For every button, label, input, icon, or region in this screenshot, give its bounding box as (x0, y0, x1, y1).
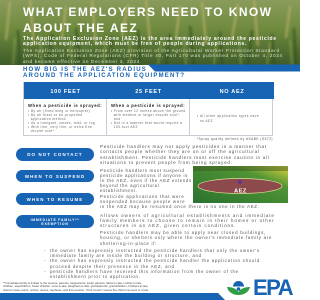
pill: when to resume (16, 193, 94, 205)
table: AEZ radius (23, 82, 273, 136)
pill: when to suspend: WHEN TO SUSPEND (25, 174, 85, 178)
pill: immediate family exemption (16, 215, 94, 228)
text: when to suspend: establishment. (100, 188, 137, 192)
footnote (3, 281, 149, 292)
25 feet list: with medium or larger droplet size*, (114, 112, 181, 116)
25 feet list (111, 108, 186, 128)
image: AEZ field illustration (193, 166, 288, 203)
pill: immediate family exemption: EXEMPTION (41, 222, 69, 226)
list markers: - (44, 269, 45, 274)
header: no AEZ: NO AEZ (220, 89, 244, 95)
text: do not contact: Pesticide handlers may not apply pesticides in a manner that (100, 144, 267, 149)
hero regulatory text: The Application Exclusion Zone (AEZ) provision of the Agricultural Worker Protection Standard (23, 48, 280, 53)
column: 25 feet details (107, 99, 190, 136)
list: exemption conditions: immediate family are inside the building or structure, and (50, 253, 202, 258)
hero title: ABOUT THE AEZ (23, 21, 138, 35)
list markers: - (44, 248, 45, 253)
text: immediate family exemption: Allows owners of agricultural establishments and immediate (100, 213, 275, 218)
footnote: sisters-in-law, aunts, uncles, nieces, nephews, and first cousins. "First cousin" means the child of an aunt or uncle. (3, 288, 149, 292)
pill: when to suspend (16, 170, 94, 182)
section heading (23, 66, 185, 79)
icon: EPA flower (227, 281, 250, 295)
list: exemption conditions: pesticide handlers have received this information from the owner of the (50, 269, 239, 274)
list markers (44, 248, 46, 274)
column: no AEZ details: no AEZ (200, 119, 213, 123)
100 feet list: droplet size* (31, 128, 54, 132)
column: 100 feet details (24, 99, 107, 136)
section heading: AROUND THE APPLICATION EQUIPMENT? (23, 73, 185, 79)
pill: do not contact (16, 148, 94, 161)
hero title (23, 5, 272, 35)
text: when to resume (100, 194, 260, 209)
100 feet list: • By air blast or air-propelled (28, 112, 83, 116)
text: do not contact: establishment. Pesticide handlers must exercise caution in all (100, 155, 270, 160)
hero intro bold text: application equipment, which must be free of people during applications. (23, 41, 247, 47)
EPA wordmark: EPA (253, 275, 292, 300)
EPA logo (227, 275, 293, 300)
footer blue band (0, 293, 225, 300)
text: do not contact: contacts people whether they are on or off the agricultural (100, 149, 260, 154)
hero title: WHAT EMPLOYERS NEED TO KNOW (23, 5, 272, 19)
text: when to resume: in the AEZ may be resumed once there is no one in the AEZ. (100, 204, 260, 209)
25 feet list: • Not in a manner that would require a (111, 120, 182, 124)
column: no AEZ details: • All other application types have (197, 114, 259, 118)
section heading: HOW BIG IS THE AEZ'S RADIUS (23, 66, 147, 72)
text: when to suspend (100, 168, 192, 192)
text: when to suspend: beyond the agricultural (100, 182, 159, 188)
blue slanted accent band (148, 64, 300, 72)
text: do not contact: situations to prevent people from being sprayed. (100, 160, 233, 165)
100 feet list: • By air (fixed wing or helicopter) (28, 108, 90, 112)
pill: when to resume: WHEN TO RESUME (27, 196, 83, 202)
text: when to suspend: pesticide applications if anyone is (100, 172, 188, 178)
column: no AEZ details (197, 114, 259, 123)
100 feet cell heading: When a pesticide is sprayed: (28, 102, 102, 108)
droplet footnote: *Spray quality defined by ASABE (S572) (197, 136, 273, 140)
list: exemption conditions: the owner has expressly instructed the pesticide handler the application should (50, 258, 260, 263)
table header row (24, 82, 274, 99)
header: 25 feet: 25 FEET (135, 89, 162, 95)
list: exemption conditions: proceed despite their presence in the AEZ, and (50, 264, 175, 269)
text: closed buildings: Pesticide handlers may be able to apply near closed buildings, (100, 230, 266, 235)
text: closed buildings: housing, or shelters only where the owner's immediate family are (100, 235, 272, 240)
hero regulatory text: and became effective on December 3, 2024. (23, 59, 142, 64)
hero regulatory text (23, 48, 283, 64)
footnote: **Immediate family is limited to the spouse, parents, stepparents, foster parents, father-in-law, mother-in-law, (3, 281, 142, 285)
text: immediate family exemption: structures in an AEZ, given certain conditions. (100, 223, 236, 228)
25 feet list: and (114, 116, 120, 120)
100 feet list (28, 108, 95, 133)
text: when to suspend: Pesticide handlers must suspend (100, 168, 185, 172)
header: 100 feet: 100 FEET (50, 89, 81, 95)
list markers: - (44, 258, 45, 263)
hero regulatory text: (WPS), Code of Federal Regulations (CFR) Title 40, Part 170 was published on October 4, 2024 (23, 53, 283, 58)
list: exemption conditions: establishment prior to application. (50, 274, 141, 279)
100 feet list: • With fine, very fine, or extra fine (28, 124, 92, 128)
text: when to resume: suspended because people were (100, 199, 185, 204)
hero intro bold text (23, 36, 277, 47)
text: closed buildings: sheltering-in-place if: (100, 241, 157, 246)
100 feet list: application method (31, 116, 66, 120)
list: exemption conditions (50, 248, 260, 279)
pill: do not contact: DO NOT CONTACT (27, 152, 83, 157)
text: closed buildings (100, 230, 272, 246)
100 feet list: • As a fumigant, smoke, mist, or fog (28, 120, 95, 124)
text: immediate family exemption: family members to choose to remain in their homes or other (100, 218, 275, 223)
pill: immediate family exemption: IMMEDIATE FAMILY** (31, 218, 79, 222)
hero background: wheat field (0, 0, 300, 65)
text: do not contact (100, 144, 270, 165)
text: when to suspend: in the AEZ, even if the AEZ extends (100, 178, 192, 182)
text: when to resume: Pesticide applications that were (100, 194, 185, 199)
25 feet cell heading: When a pesticide is sprayed: (111, 102, 185, 108)
AEZ label: AEZ (234, 189, 247, 195)
footnote: children, stepchildren, foster children, sons-in-law, daughters-in-law, grandparents, grandchildren, brothers-in-law, (3, 284, 148, 288)
hero intro bold text: The Application Exclusion Zone (AEZ) is the area immediately around the pesticide (23, 36, 277, 42)
list: exemption conditions: the owner has expressly instructed the pesticide handlers that only the owner's (50, 248, 260, 253)
text: immediate family exemption (100, 213, 275, 228)
25 feet list: • From over 12 inches above the ground (111, 108, 186, 112)
25 feet list: 100-foot AEZ (114, 124, 138, 128)
